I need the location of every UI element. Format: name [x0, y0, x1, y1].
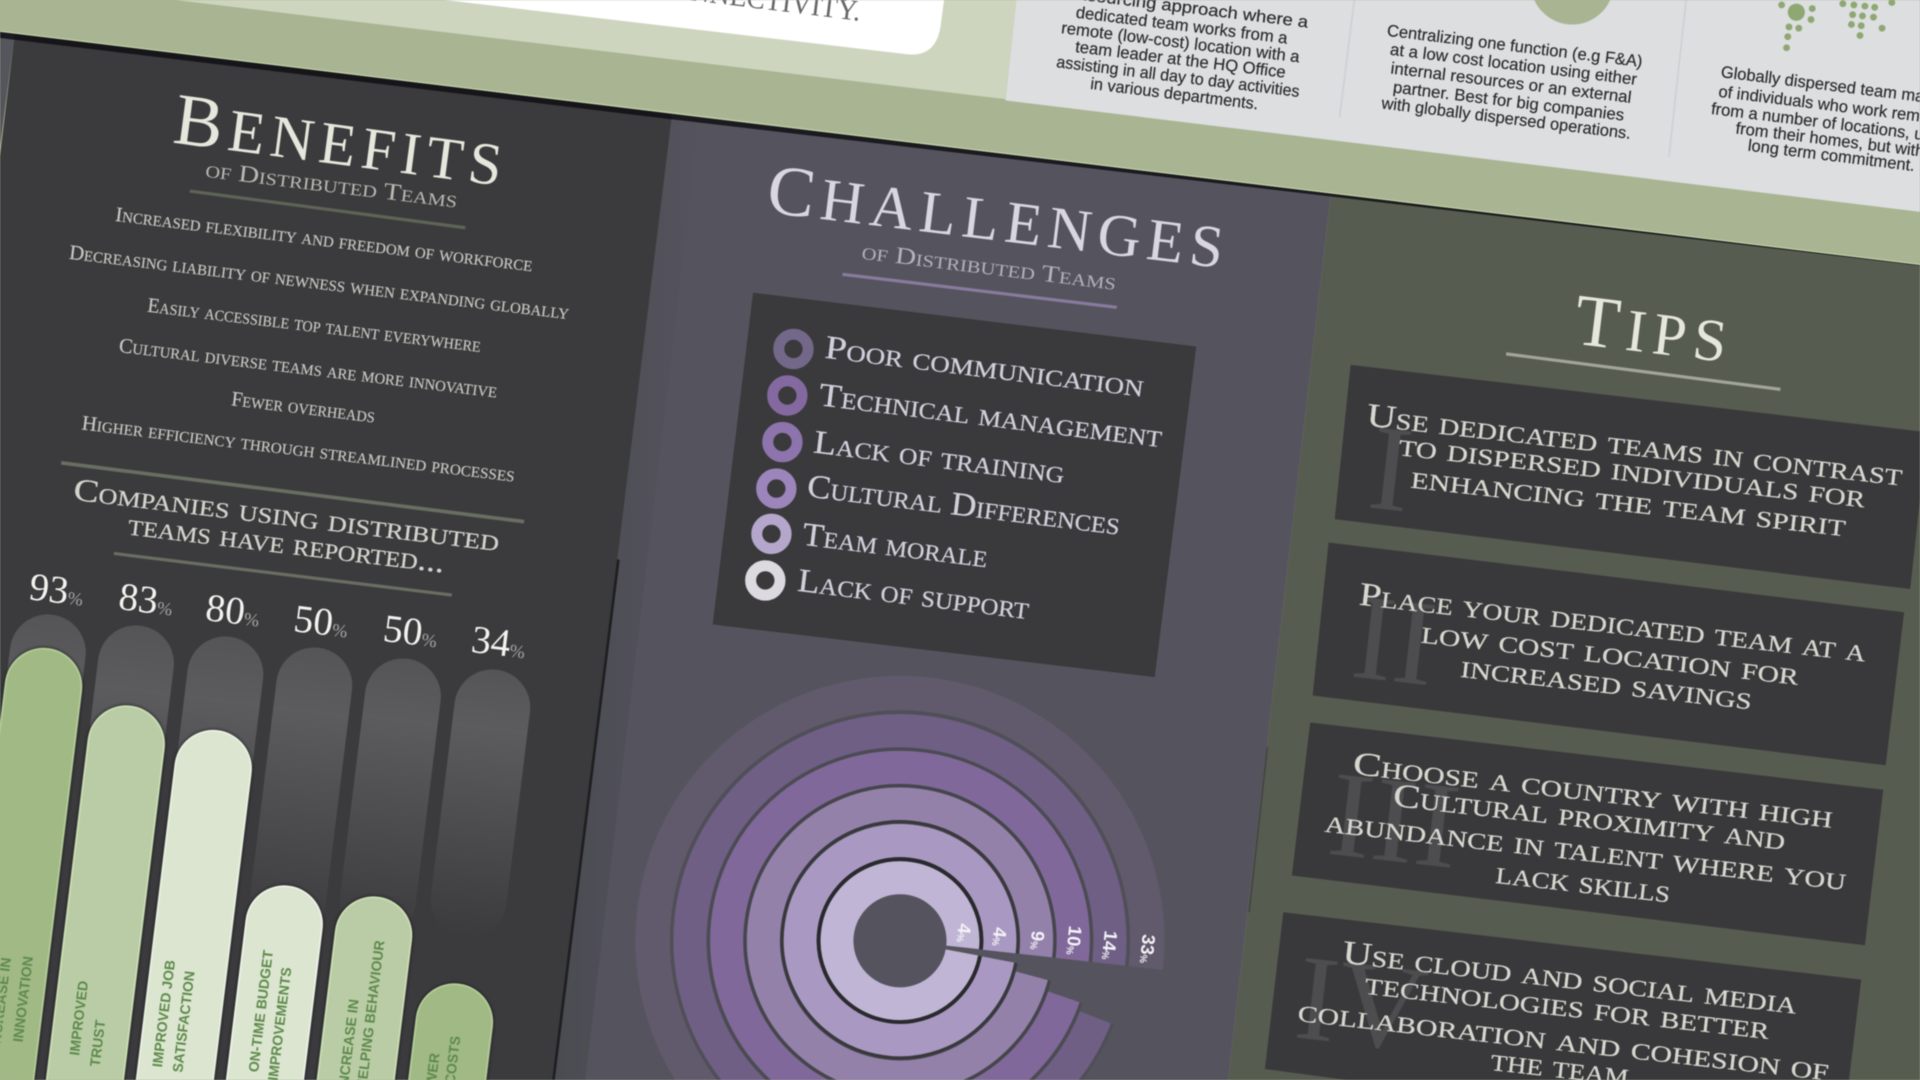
- legend box: [713, 293, 1196, 677]
- ring labels: 9%: [1026, 930, 1049, 951]
- tip text 3: Choose a country with high: [1351, 746, 1835, 836]
- heading: benefits: BENEFITS: [170, 78, 508, 202]
- tip text 4: collaboration and cohesion of: [1296, 993, 1831, 1080]
- bar: fewer costs 34%: [400, 980, 497, 1080]
- ring: 9%: [763, 804, 1037, 1077]
- values: 80%: [203, 586, 263, 636]
- chart heading: Companies using distributed: [72, 472, 501, 558]
- tip text 1: Use dedicated teams in contrast: [1365, 398, 1904, 493]
- bar: improved trust 83%: TRUST: [87, 1019, 108, 1068]
- heading: tips: TIPS: [1570, 279, 1732, 378]
- values: 34%: [469, 618, 528, 667]
- chart heading: teams have reported...: [126, 507, 447, 580]
- tip text 1: [1365, 398, 1904, 544]
- text: shared service model: Centralizing one function (e.g F&A): [1386, 21, 1644, 71]
- text: dispersed team model: long term commitment.: [1747, 136, 1916, 175]
- legend item: cultural differences: Cultural Differences: [805, 469, 1122, 543]
- tip text 1: to dispersed individuals for: [1397, 427, 1868, 515]
- text: dedicated team model: remote (low-cost) location with a: [1060, 18, 1302, 66]
- ring labels: [953, 923, 1160, 965]
- tip text 3: Cultural proximity and: [1391, 778, 1787, 858]
- icon: centralized circle: [1531, 0, 1614, 24]
- tip text 2: low cost location for: [1419, 615, 1802, 693]
- tip text 3: abundance in talent where you: [1323, 804, 1848, 898]
- text: dedicated team model: in various departments.: [1089, 74, 1259, 113]
- text: dispersed team model: [1710, 62, 1920, 175]
- panel: tips: [1228, 193, 1920, 1080]
- bar: improved trust 83%: IMPROVED: [66, 980, 91, 1056]
- legend item: poor communication: Poor communication: [823, 330, 1146, 405]
- bar: improved job satisfaction 80%: SATISFACTION: [169, 970, 198, 1073]
- numeral II: II: [1346, 569, 1443, 712]
- values: 93%: [27, 565, 86, 615]
- panel: benefits: [0, 33, 672, 1080]
- tip text 4: [1296, 935, 1831, 1080]
- tip card 3: [1292, 722, 1883, 945]
- panel: team models: [1005, 0, 1920, 212]
- text: shared service model: with globally dispersed operations.: [1379, 93, 1632, 143]
- tip text 4: Use cloud and social media: [1341, 935, 1799, 1022]
- numeral III: III: [1322, 746, 1467, 895]
- text: shared service model: internal resources or an external: [1390, 58, 1633, 107]
- benefits list: Decreasing liability of newness when expanding globally: [68, 240, 571, 324]
- benefits list: Increased flexibility and freedom of workforce: [114, 202, 534, 276]
- icon: dotted world map: [1778, 0, 1895, 51]
- ring: 33%: [653, 693, 1147, 1080]
- legend item: lack of support: Lack of support: [796, 563, 1031, 627]
- legend item: technical management: Technical management: [817, 377, 1164, 455]
- bar: improved job satisfaction 80%: [129, 726, 255, 1080]
- panel: intro strip: [175, 0, 1016, 99]
- ring: 10%: [727, 767, 1073, 1080]
- benefits list: Higher efficiency through streamlined processes: [81, 410, 516, 487]
- subheading: of Distributed Teams: [204, 157, 459, 214]
- text: shared service model: [1379, 21, 1644, 143]
- values: 83%: [116, 575, 176, 624]
- bar: improved trust 83%: [39, 702, 168, 1080]
- text: dedicated team model: [1055, 0, 1310, 113]
- text: shared service model: at a low cost location using either: [1389, 40, 1639, 89]
- bar: on-time budget improvements 50%: IMPROVEMENTS: [265, 966, 294, 1080]
- tip card 1: [1335, 365, 1920, 589]
- tip text 4: technologies for better: [1363, 966, 1772, 1047]
- text: dedicated team model: team leader at the HQ Office: [1074, 37, 1287, 82]
- benefits list: [68, 202, 571, 487]
- text: shared service model: partner. Best for big companies: [1392, 77, 1625, 125]
- tip card 2: [1313, 542, 1904, 765]
- chart heading: [72, 472, 501, 580]
- bar: increase in helping behaviour 50%: [309, 893, 416, 1080]
- values: [27, 565, 528, 667]
- tip text 3: lack skills: [1494, 855, 1672, 910]
- legend item: poor communication: [779, 330, 1146, 405]
- white intro card: [444, 0, 944, 55]
- ring: 4% inner: [837, 878, 963, 1004]
- backdrop strip: [0, 31, 15, 147]
- text: dispersed team model: from their homes, but with: [1735, 119, 1920, 161]
- bar: on-time budget improvements 50%: [218, 882, 326, 1080]
- benefits list: Easily accessible top talent everywhere: [146, 293, 482, 357]
- benefits list: Fewer overheads: [230, 386, 376, 428]
- ring labels: 4%: [988, 926, 1011, 948]
- ring labels: 14%: [1098, 930, 1122, 961]
- bar: increase in innovation 93%: INNOVATION: [10, 955, 36, 1043]
- ring: 4%: [800, 841, 1000, 1040]
- bar: increase in innovation 93%: [0, 644, 86, 1080]
- text: dedicated team model: dedicated team works from a: [1075, 3, 1289, 48]
- tip text 1: enhancing the team spirit: [1409, 460, 1848, 544]
- ring labels: 33%: [1136, 933, 1160, 965]
- numeral IV: IV: [1289, 930, 1433, 1079]
- tip card 4: [1265, 912, 1861, 1080]
- ring: 14%: [690, 731, 1110, 1080]
- bar: improved job satisfaction 80%: IMPROVED JOB: [149, 959, 178, 1068]
- benefits list: Cultural diverse teams are more innovative: [118, 333, 499, 403]
- values: 50%: [291, 597, 351, 647]
- heading: challenges: CHALLENGES: [763, 150, 1228, 284]
- ring labels: 10%: [1062, 925, 1086, 956]
- tip text 2: Place your dedicated team at a: [1357, 577, 1868, 669]
- bar tracks: [0, 610, 535, 944]
- legend item: team morale: Team morale: [801, 517, 990, 575]
- bar chart: [0, 565, 535, 1080]
- tip text 2: [1357, 577, 1868, 717]
- tip text 2: increased savings: [1459, 649, 1754, 717]
- subheading: of Distributed Teams: [860, 239, 1118, 296]
- legend item: lack of training: Lack of training: [812, 425, 1067, 491]
- radial bar chart: [653, 693, 1147, 1080]
- panel: challenges: [553, 114, 1331, 1080]
- numeral I: I: [1363, 400, 1419, 539]
- bar: on-time budget improvements 50%: ON-TIME BUDGET: [245, 949, 276, 1073]
- ring labels: 4%: [953, 923, 975, 944]
- values: 50%: [381, 607, 440, 656]
- text: dedicated team model: assisting in all day to day activities: [1055, 52, 1301, 101]
- tip text 3: [1323, 746, 1848, 910]
